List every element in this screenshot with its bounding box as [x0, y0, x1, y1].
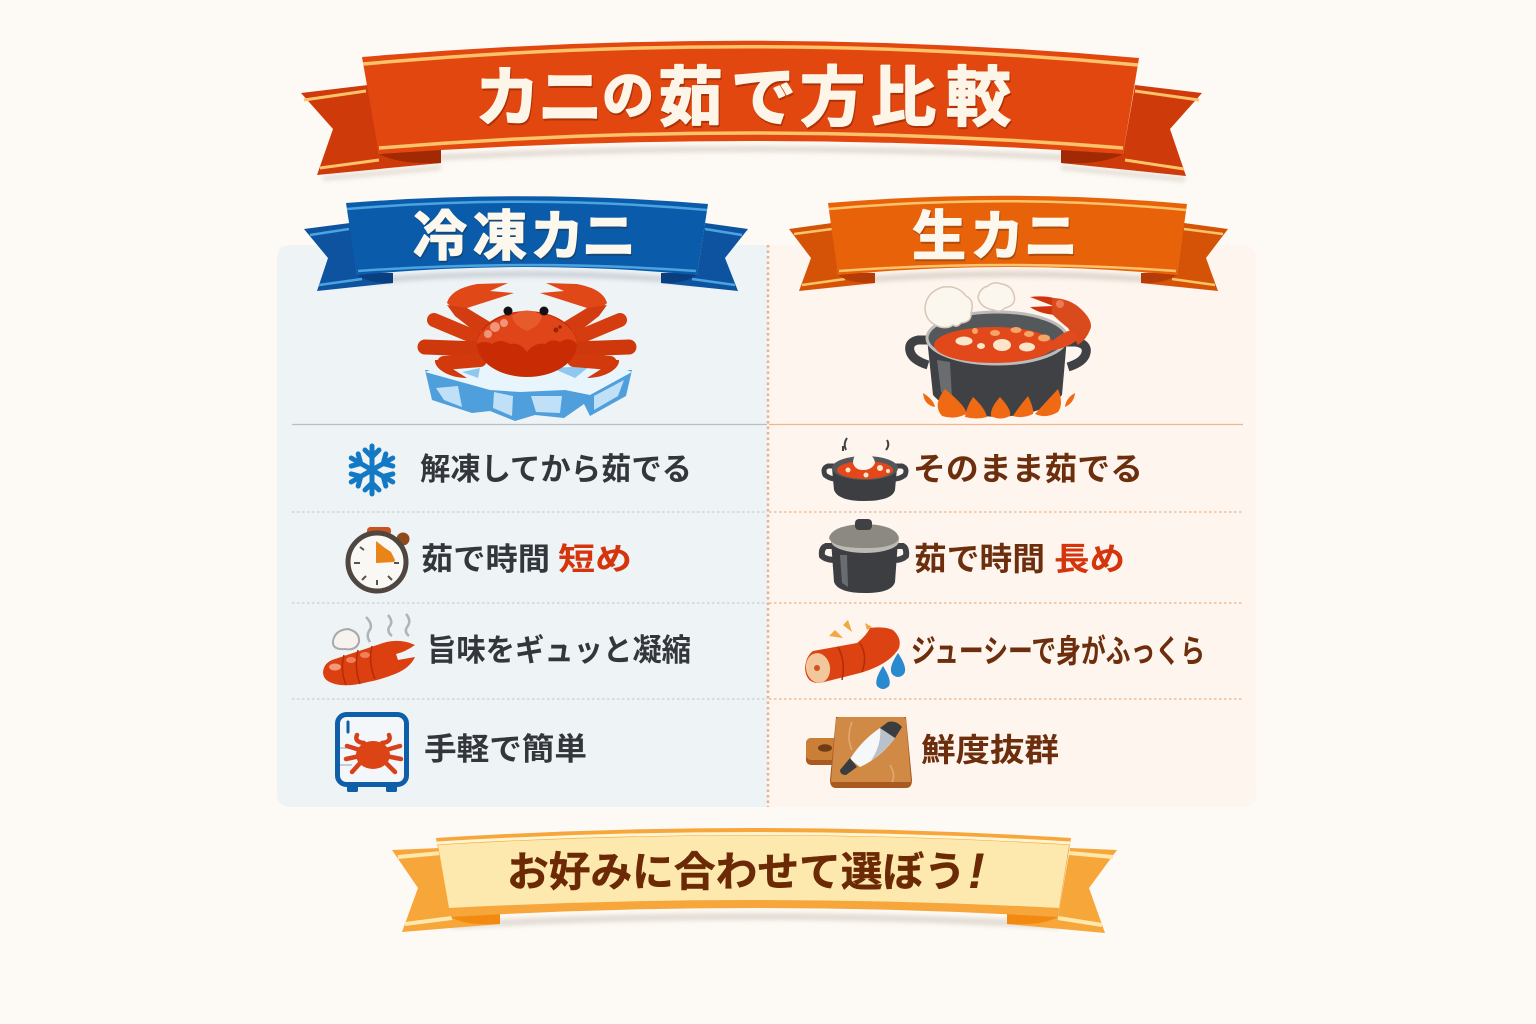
title text: で — [731, 61, 796, 134]
row text: 茹で時間 — [914, 541, 1045, 577]
icon: snowflake — [348, 446, 396, 494]
left tail — [789, 223, 875, 291]
left limbs — [425, 283, 514, 378]
row text: そのまま茹でる — [913, 451, 1143, 487]
icon: boiling pot with crab claw — [910, 283, 1091, 418]
title text: カ — [475, 61, 540, 134]
row: boil as is — [824, 438, 1143, 501]
right limbs — [540, 283, 629, 378]
icon: cutting board and knife — [806, 717, 912, 788]
panel: fresh crab column — [768, 245, 1256, 807]
row text: 鮮度抜群 — [921, 732, 1059, 768]
icon: crab on ice — [425, 283, 632, 421]
row: longer boiling time — [822, 519, 1125, 593]
title text: 較 — [946, 61, 1011, 134]
row text: 手軽で簡単 — [424, 732, 587, 767]
left ribbon tail — [301, 85, 441, 175]
highlighted word: 短め — [558, 542, 632, 577]
icon: crab in freezer — [338, 714, 406, 792]
right ribbon tail — [1061, 85, 1202, 176]
row: outstanding freshness — [806, 717, 1059, 788]
heading text: 冷凍カニ — [413, 207, 636, 267]
row text: 解凍してから茹でる — [420, 452, 692, 487]
highlighted word: 長め — [1054, 541, 1125, 577]
row: shorter boiling time — [348, 527, 632, 591]
title text: 茹 — [658, 61, 723, 134]
flames — [923, 389, 1075, 418]
pot handles — [910, 340, 1086, 367]
title text: の — [602, 68, 654, 126]
title banner — [301, 41, 1202, 182]
row text: 茹で時間 — [421, 542, 550, 577]
pot body — [927, 338, 1067, 417]
icon: small boiling pot — [824, 438, 906, 501]
soup — [934, 327, 1054, 363]
row text: 旨味をギュッと凝縮 — [427, 633, 691, 668]
pot rim — [927, 312, 1067, 364]
frozen crab heading ribbon — [304, 196, 748, 291]
right tail — [1141, 223, 1228, 291]
main ribbon — [346, 196, 708, 275]
title text: 方 — [800, 61, 865, 134]
heading text: 生カニ — [912, 207, 1078, 267]
row: juicy and plump — [804, 620, 1205, 689]
row: easy and convenient — [338, 714, 587, 792]
row: concentrated umami — [323, 614, 691, 685]
icon: juicy crab leg — [804, 620, 905, 689]
icon: timer — [348, 527, 410, 591]
closing text: お好みに合わせて選ぼう — [507, 849, 966, 895]
icon: lidded pot — [822, 519, 906, 593]
right tail — [661, 223, 748, 291]
crab claw on pot — [1030, 296, 1091, 352]
ice block — [425, 364, 632, 421]
row: thaw before boiling — [348, 446, 692, 494]
steam clouds — [925, 283, 1015, 328]
fresh crab heading ribbon — [789, 196, 1228, 291]
closing banner — [392, 828, 1117, 933]
crab body — [477, 306, 577, 377]
title text: ニ — [538, 61, 603, 134]
left tail — [392, 848, 500, 932]
title text: 比 — [871, 61, 936, 134]
right tail — [1007, 848, 1117, 933]
main ribbon — [828, 196, 1187, 275]
row text: ジューシーで身がふっくら — [911, 633, 1205, 669]
icon: steaming crab claw — [323, 614, 415, 685]
left tail — [304, 223, 393, 291]
main ribbon — [362, 41, 1139, 154]
exclamation mark: ! — [968, 843, 985, 899]
panel: frozen crab column — [277, 245, 768, 807]
main ribbon — [436, 828, 1071, 917]
